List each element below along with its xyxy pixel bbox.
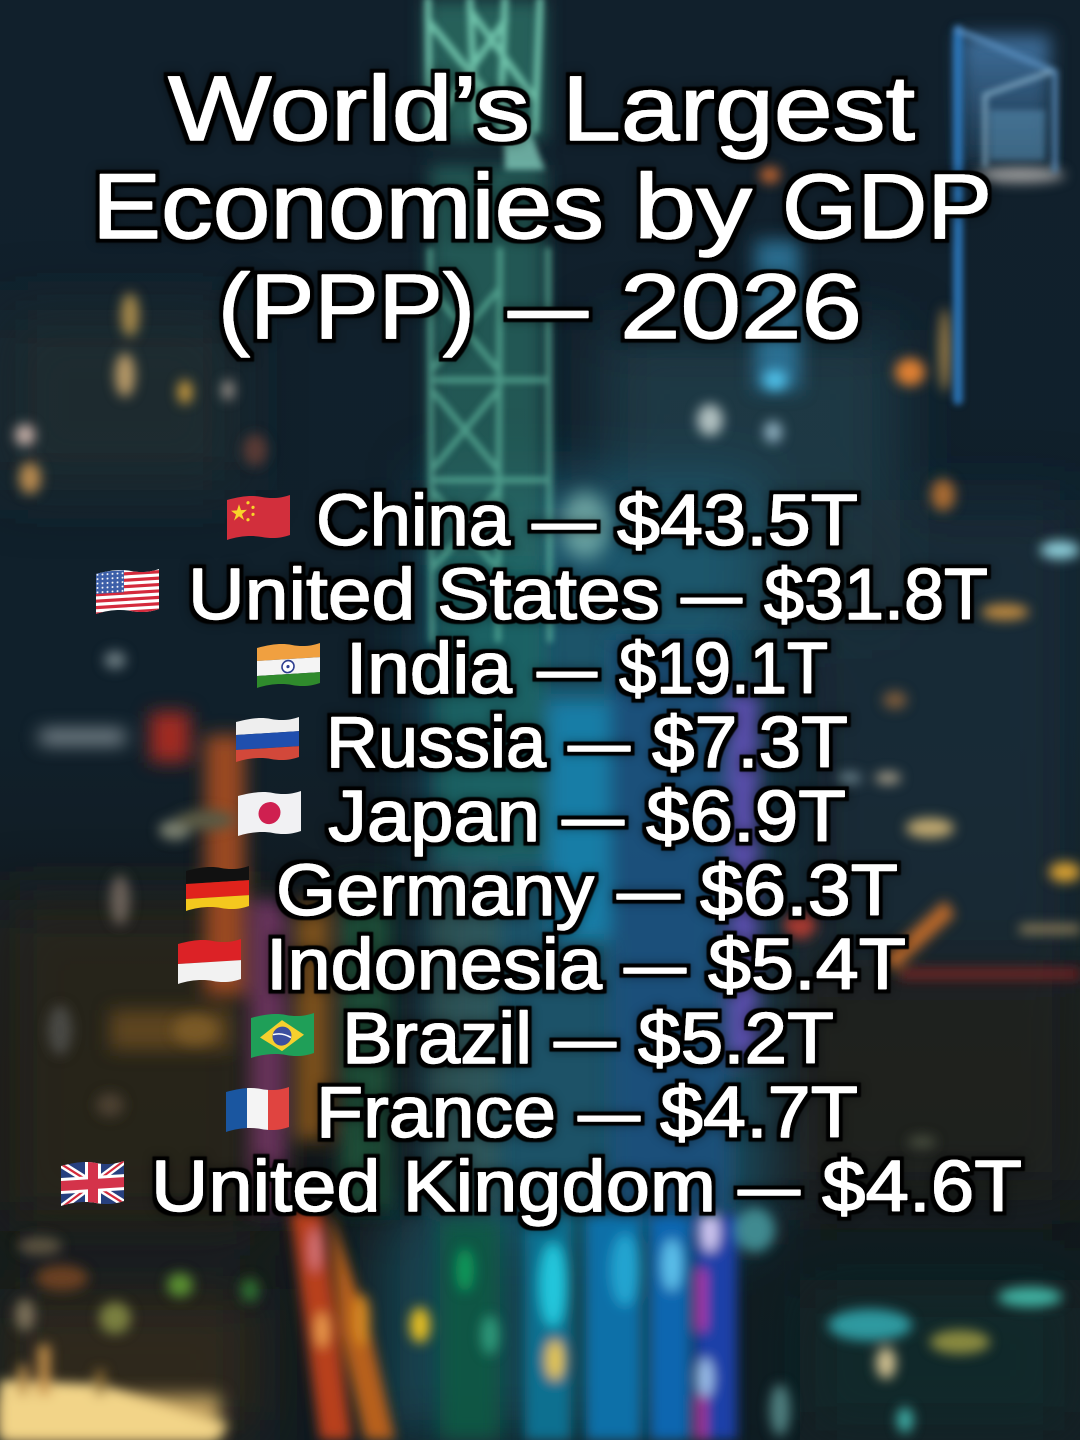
label: France: $4.7T xyxy=(660,1073,858,1153)
label: Japan: — xyxy=(562,777,624,857)
title: by xyxy=(634,156,752,258)
ranking row: Brazil xyxy=(251,999,834,1079)
label: Russia: — xyxy=(568,703,630,783)
icon: India flag xyxy=(257,643,320,688)
label: India: — xyxy=(537,629,597,709)
ranking row: Japan xyxy=(238,777,846,857)
ranking row: Indonesia xyxy=(178,925,906,1005)
label: United Kingdom: — xyxy=(738,1147,800,1227)
label: Brazil: — xyxy=(554,999,616,1079)
label: France: — xyxy=(578,1073,640,1153)
title: — xyxy=(508,256,588,358)
ranking row: China xyxy=(227,481,858,561)
title: Largest xyxy=(562,58,915,160)
label: United States: — xyxy=(681,555,742,635)
icon: Indonesia flag xyxy=(178,939,241,984)
title: Economies xyxy=(92,156,604,258)
title: GDP xyxy=(782,156,992,258)
label: China: — xyxy=(532,481,596,561)
label: Germany: Germany xyxy=(276,851,594,931)
ranking row: Germany xyxy=(186,851,898,931)
icon: France flag xyxy=(226,1083,289,1137)
label: Japan: $6.9T xyxy=(646,777,846,857)
label: China: China xyxy=(316,481,511,561)
label: Germany: — xyxy=(617,851,680,931)
icon: Brazil flag xyxy=(251,1013,314,1058)
icon: China flag xyxy=(227,495,290,540)
title: World’s xyxy=(168,58,530,160)
label: Japan: Japan xyxy=(328,777,540,857)
label: China: $43.5T xyxy=(617,481,858,561)
label: United Kingdom: $4.6T xyxy=(822,1147,1022,1227)
label: Russia: $7.3T xyxy=(652,703,848,783)
ranking row: India xyxy=(257,629,828,709)
label: United Kingdom: United Kingdom xyxy=(151,1147,716,1227)
label: United States: $31.8T xyxy=(764,555,988,635)
icon: United States flag xyxy=(96,569,159,614)
ranking row: Russia xyxy=(236,703,848,783)
label: United States: United States xyxy=(188,555,660,635)
label: India: $19.1T xyxy=(619,629,828,709)
label: Brazil: $5.2T xyxy=(638,999,834,1079)
icon: Japan flag xyxy=(238,791,301,836)
label: Brazil: Brazil xyxy=(342,999,532,1079)
ranking row: United Kingdom xyxy=(61,1147,1022,1227)
icon: Germany flag xyxy=(186,866,249,911)
icon: Russia flag xyxy=(236,717,299,762)
title: (PPP) xyxy=(218,256,475,358)
label: Indonesia: Indonesia xyxy=(266,925,603,1005)
label: France: France xyxy=(316,1073,556,1153)
label: Indonesia: $5.4T xyxy=(708,925,906,1005)
icon: United Kingdom flag xyxy=(61,1157,125,1211)
title xyxy=(92,58,992,358)
ranking row: France xyxy=(226,1073,858,1153)
ranking row: United States xyxy=(96,555,988,635)
label: Germany: $6.3T xyxy=(700,851,898,931)
label: Indonesia: — xyxy=(624,925,686,1005)
title: 2026 xyxy=(620,256,862,358)
label: Russia: Russia xyxy=(326,703,547,783)
label: India: India xyxy=(346,629,513,709)
